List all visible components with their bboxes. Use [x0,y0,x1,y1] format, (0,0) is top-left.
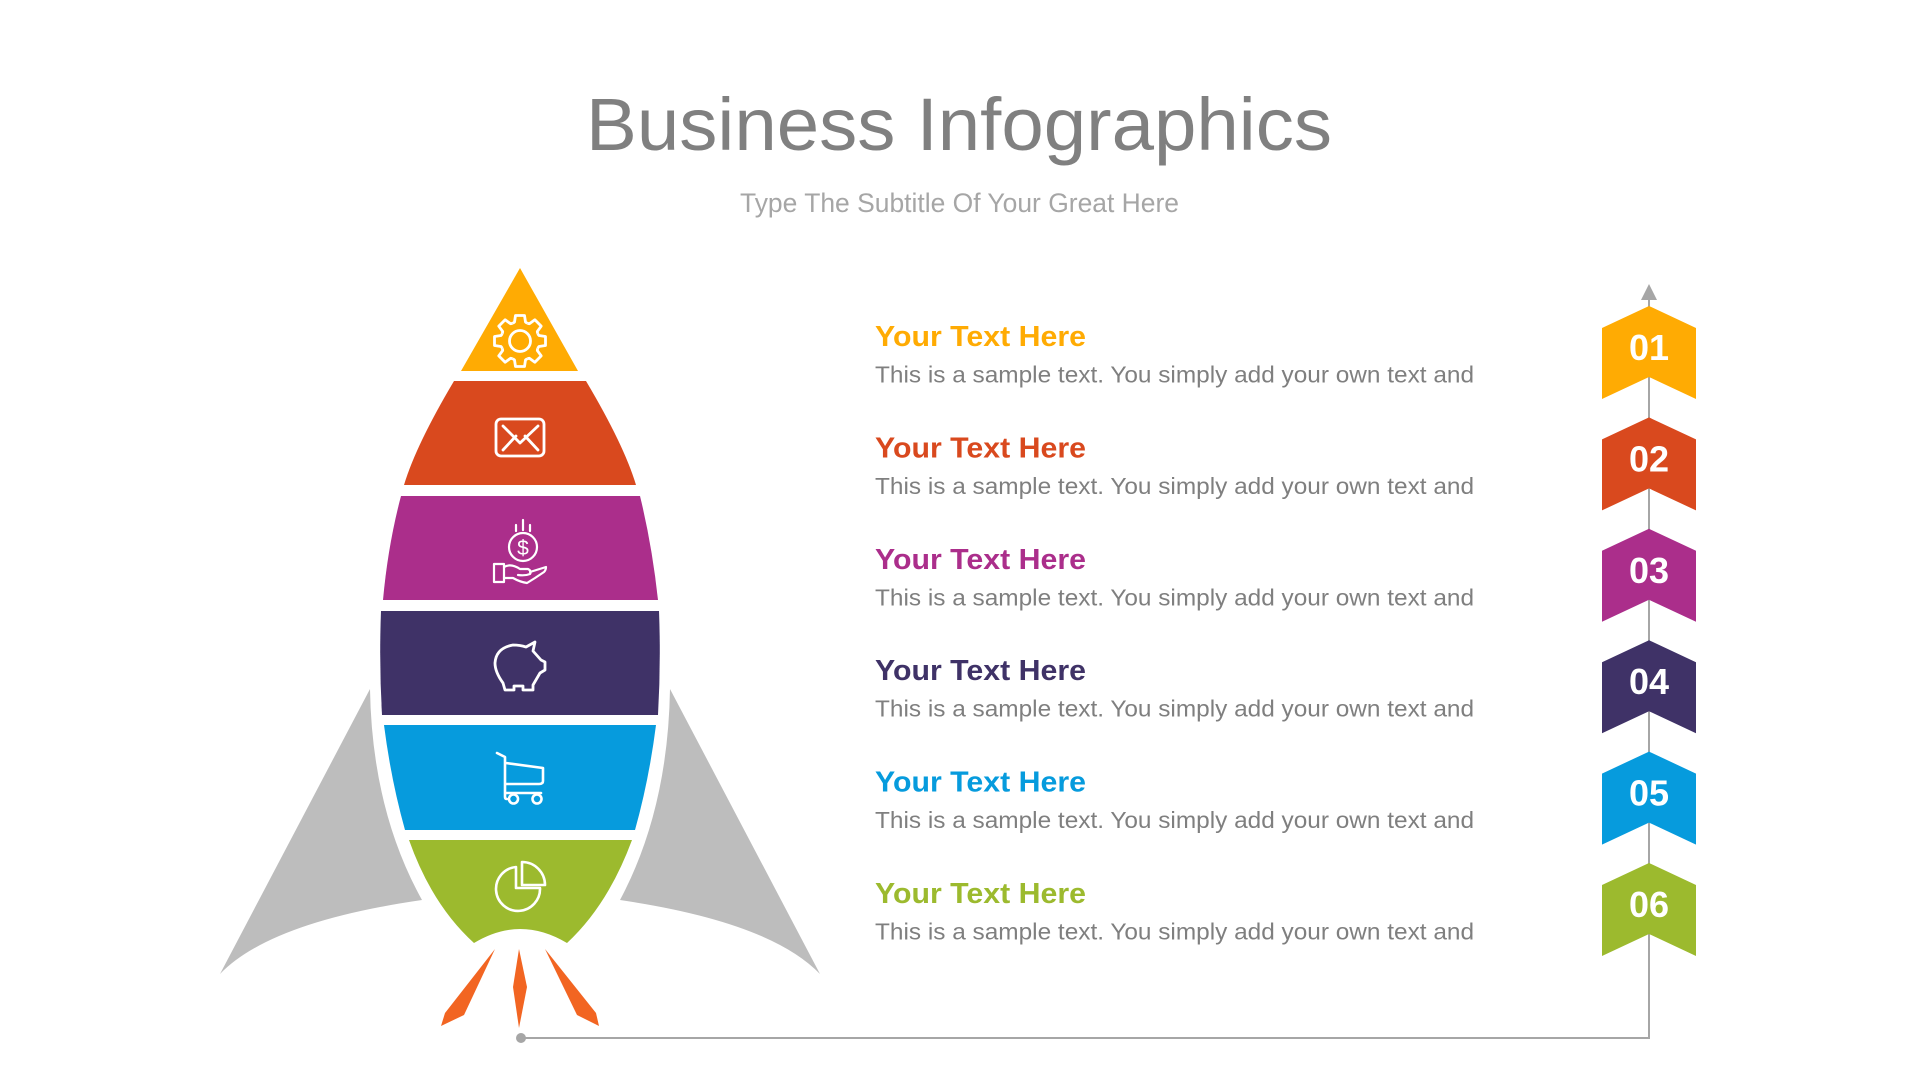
item 5 text [875,767,1474,833]
item 5 text: This is a sample text. You simply add your own text and [875,807,1474,833]
icon: pie chart [496,862,545,911]
item 4 text: Your Text Here [875,655,1086,687]
item 6 text: This is a sample text. You simply add your own text and [875,918,1474,944]
icon: hand with coin [494,520,546,583]
item 4 text [875,655,1474,722]
item 5 text: Your Text Here [875,767,1086,799]
segment 4 [380,611,660,715]
item 1 text [875,321,1474,388]
item 3 text [875,544,1474,610]
item 4 text: This is a sample text. You simply add your own text and [875,696,1474,722]
left fin [220,689,422,974]
item 1 text: This is a sample text. You simply add your own text and [875,362,1474,388]
segment 5 [384,725,656,830]
badge 06 [1602,863,1696,956]
badge 03 [1602,529,1696,622]
subtitle: Type The Subtitle Of Your Great Here [740,188,1179,218]
exhaust flames [441,949,599,1028]
icon: shopping cart [497,753,543,804]
icon: piggy bank [495,642,545,690]
item 3 text: This is a sample text. You simply add your own text and [875,584,1474,610]
item 2 text: Your Text Here [875,432,1086,464]
item 3 text: Your Text Here [875,544,1086,576]
rocket [220,268,820,1028]
segment 1 nose [461,268,578,371]
badge 05 [1602,752,1696,845]
segment 6 [409,840,632,943]
item 6 text: Your Text Here [875,878,1086,910]
item 6 text [875,878,1474,944]
item 1 text: Your Text Here [875,321,1086,353]
item 2 text [875,432,1474,499]
badge 04: 04 [1629,661,1669,702]
segment 2 [404,381,636,485]
badge 04 [1602,640,1696,733]
right fin [620,689,820,974]
segment 3 [383,496,658,600]
icon: gear [494,316,546,366]
item 2 text: This is a sample text. You simply add your own text and [875,473,1474,499]
badge 02: 02 [1629,438,1669,479]
connector line with arrow [516,284,1657,1043]
badge 02 [1602,417,1696,510]
badge 03: 03 [1629,550,1669,591]
badge 06: 06 [1629,884,1669,925]
icon: envelope [496,419,544,456]
icon: hand with coin: $ [517,537,529,560]
badge 05: 05 [1629,773,1669,814]
badge 01 [1602,306,1696,399]
badge 01: 01 [1629,327,1669,368]
title: Business Infographics [586,83,1332,166]
